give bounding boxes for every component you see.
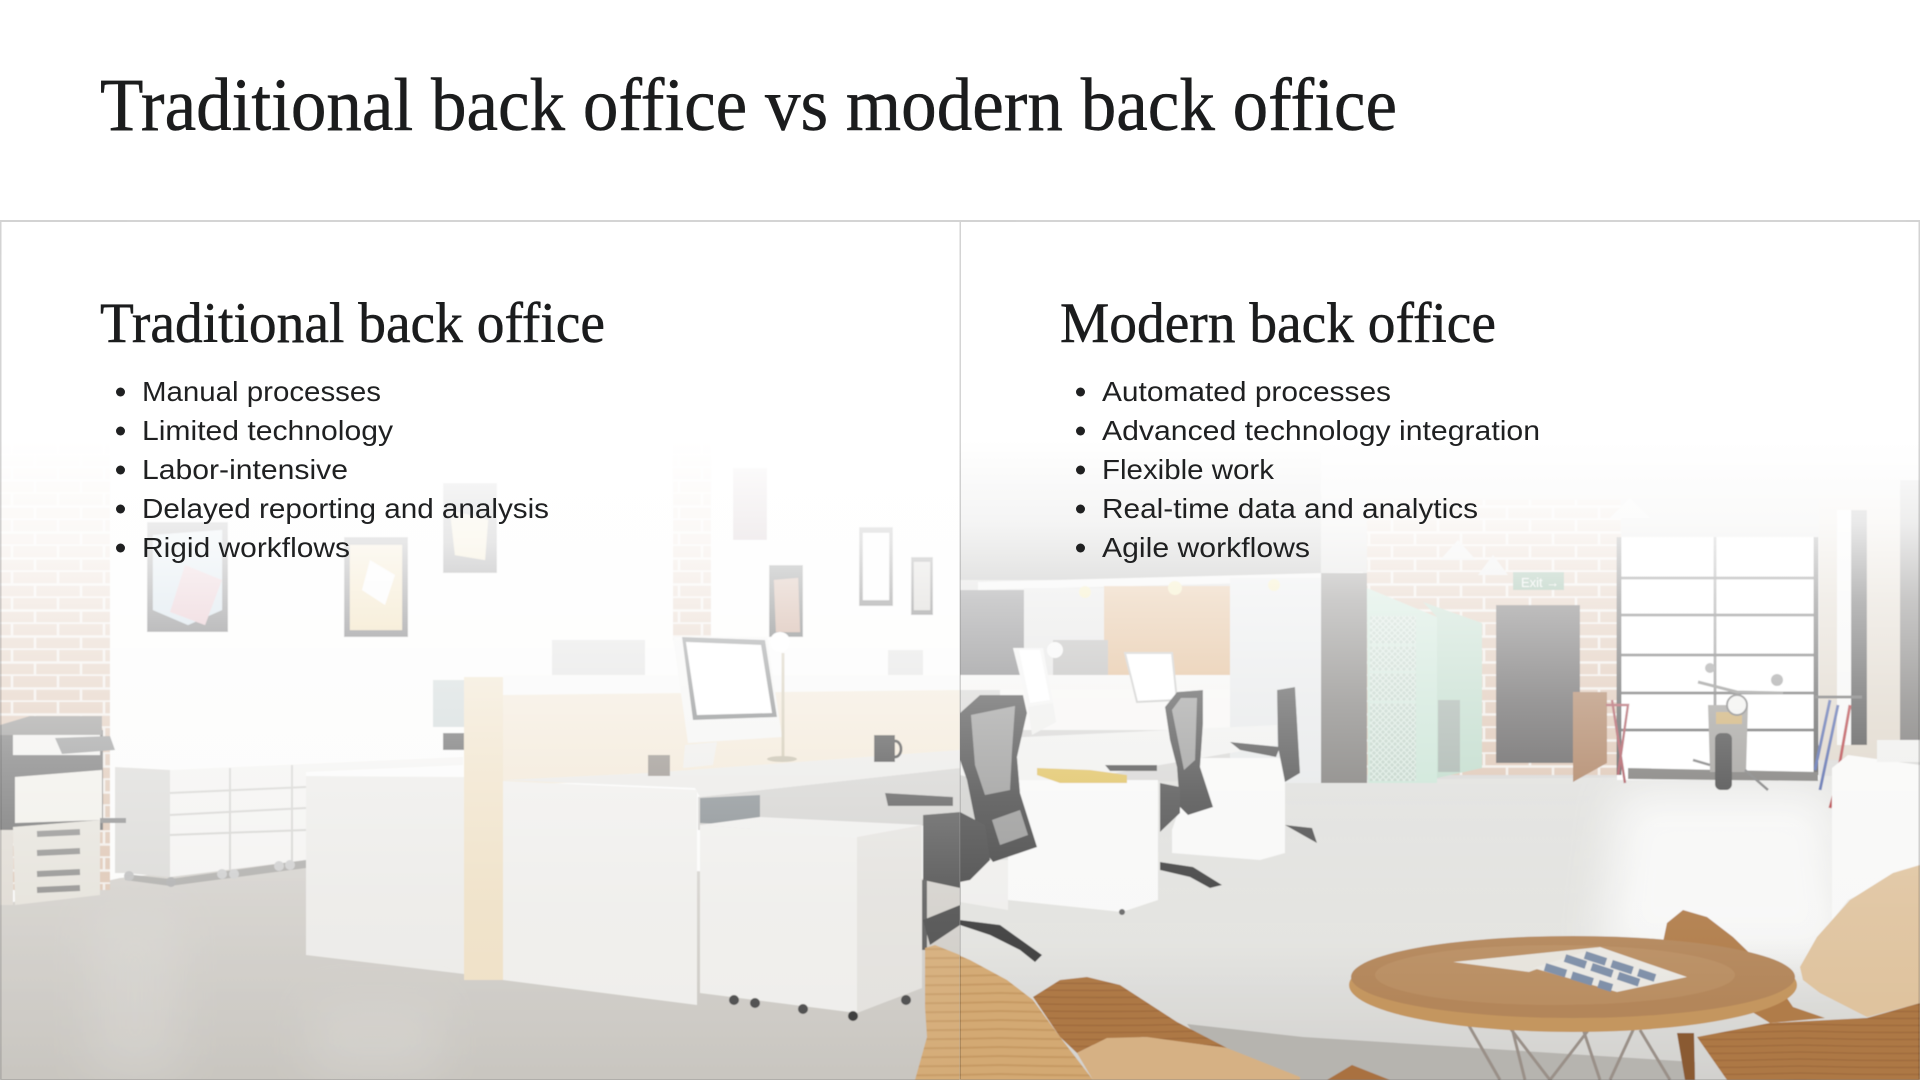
list: modern bullets: Automated processes — [1102, 376, 1391, 407]
wood partition — [503, 690, 960, 785]
white panel front — [503, 781, 697, 1005]
white cabinet — [1832, 755, 1920, 920]
photo: traditional office scene — [0, 440, 960, 1080]
list: traditional bullets: Rigid workflows — [142, 532, 350, 563]
right bicycles — [1815, 697, 1862, 808]
cart — [1438, 700, 1460, 772]
exit sign — [1513, 572, 1564, 590]
reflections on floor — [90, 910, 440, 1080]
list: traditional bullets: Limited technology — [142, 415, 393, 446]
background screens — [552, 640, 645, 675]
list: traditional bullets: Manual processes — [142, 376, 381, 407]
title: Traditional back office vs modern back office — [100, 64, 1397, 147]
office chair middle — [1105, 690, 1222, 888]
left bicycles — [1606, 700, 1628, 783]
overlay: right fade — [960, 440, 1920, 1080]
brick column — [0, 538, 110, 890]
panel: modern back office — [1060, 292, 1540, 563]
right columns — [1837, 480, 1920, 745]
ceiling lamps — [1444, 541, 1508, 575]
desk underside — [960, 745, 1100, 822]
green lockers — [1367, 588, 1482, 783]
wall blocks — [1024, 588, 1104, 678]
pen holder and mug — [648, 735, 901, 776]
door — [1496, 605, 1580, 763]
list: modern bullets: Real-time data and analytics — [1102, 493, 1478, 524]
monitors — [1013, 642, 1177, 735]
list: modern bullets — [1076, 376, 1540, 563]
wood barrier — [1573, 692, 1607, 782]
rug — [1187, 1024, 1695, 1080]
wood chair right — [1662, 865, 1920, 1080]
exit sign: Exit → — [1521, 575, 1559, 590]
back wall brick — [1366, 561, 1617, 776]
wall pictures — [147, 468, 933, 637]
far right wall — [1820, 701, 1900, 760]
list: traditional bullets: Delayed reporting and analysis — [142, 493, 549, 524]
open book — [1453, 947, 1687, 992]
wood strip — [464, 677, 503, 980]
round table — [1349, 936, 1797, 1080]
panel: traditional back office — [100, 292, 605, 563]
white panel — [306, 776, 464, 974]
monitor — [673, 632, 797, 768]
wood chair front left — [915, 945, 1390, 1080]
binders — [433, 680, 464, 750]
desk partition — [960, 675, 1230, 690]
chair arm left part — [885, 793, 960, 950]
list: modern bullets: Agile workflows — [1102, 532, 1310, 563]
binder under desk — [700, 795, 760, 825]
motorcycle — [1693, 663, 1783, 790]
pendant lamps — [1079, 579, 1280, 598]
list: traditional bullets — [116, 376, 549, 563]
heading: traditional: Traditional back office — [100, 292, 605, 355]
panel borders — [0, 220, 1920, 1080]
drawers — [114, 764, 306, 887]
floor — [960, 800, 1800, 986]
heading: modern: Modern back office — [1060, 292, 1496, 355]
office chair front — [946, 695, 1042, 962]
overlay: left fade — [0, 440, 960, 1080]
list: modern bullets: Flexible work — [1102, 454, 1275, 485]
brick strip — [673, 538, 711, 636]
window — [1617, 537, 1819, 781]
list: modern bullets: Advanced technology integration — [1102, 415, 1540, 446]
white band — [503, 675, 960, 695]
left dark wall — [960, 590, 1024, 676]
wood chair left edge — [915, 945, 960, 1080]
floor — [0, 858, 960, 1080]
drawer unit — [700, 817, 922, 1021]
ceiling — [960, 539, 1321, 580]
desk underside — [698, 768, 960, 830]
desk top — [503, 750, 960, 797]
photo: modern office scene — [960, 481, 1920, 1080]
printer — [0, 716, 126, 905]
desk top — [960, 725, 1277, 790]
office chair far — [1230, 687, 1317, 843]
desk units — [960, 758, 1285, 915]
rail — [978, 573, 1322, 590]
list: traditional bullets: Labor-intensive — [142, 454, 348, 485]
